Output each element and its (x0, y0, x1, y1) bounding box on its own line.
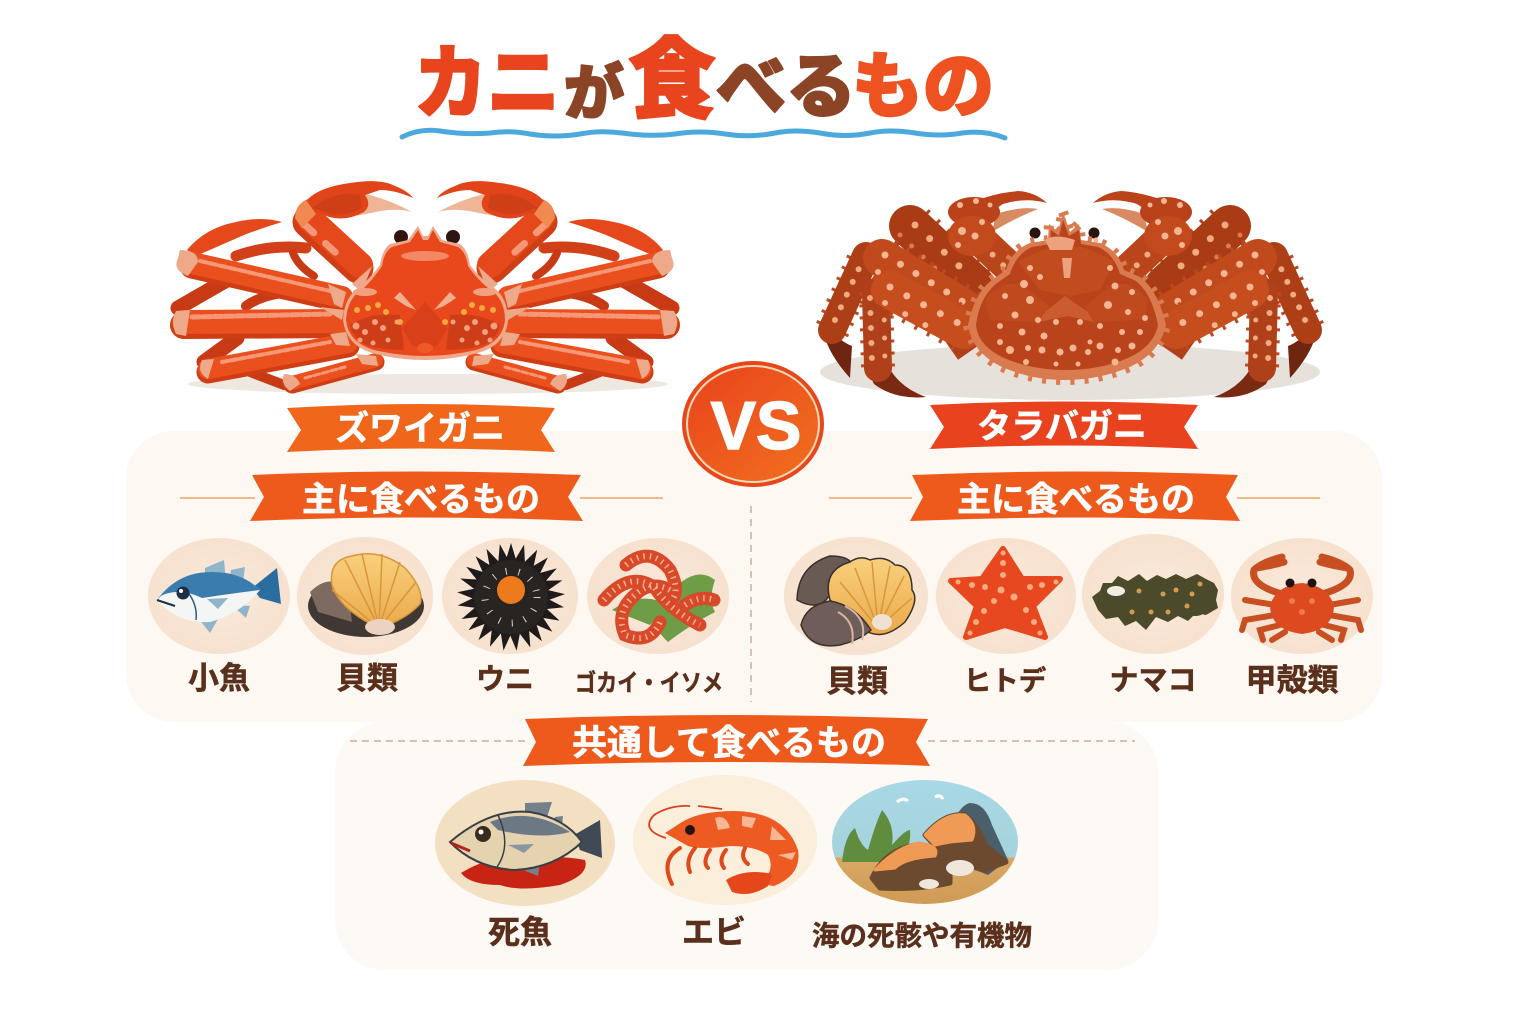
labels: common foods: 死魚 (488, 914, 552, 950)
labels: left foods: ウニ (476, 664, 534, 696)
icon: starfish (936, 538, 1076, 654)
labels: left foods: 貝類 (336, 661, 398, 696)
panel: common foods background (335, 722, 1158, 970)
heading: tarabagani ribbon (930, 402, 1198, 449)
labels: right foods: 甲殻類 (1246, 663, 1338, 698)
heading: tarabagani ribbon: タラバガニ (977, 408, 1147, 446)
icon: sea urchin (442, 538, 578, 654)
heading: common foods ribbon (523, 715, 930, 766)
labels: common foods (488, 914, 1032, 951)
labels: left foods (188, 661, 723, 697)
labels: left foods: ゴカイ・イソメ (575, 669, 723, 697)
icon: shellfish group (784, 537, 928, 655)
labels: right foods: 貝類 (826, 664, 888, 699)
icon: king crab (820, 191, 1320, 400)
heading: right main foods ribbon: 主に食べるもの (957, 481, 1195, 519)
title: が (564, 60, 624, 127)
labels: right foods: ヒトデ (964, 665, 1047, 696)
title: 食 (628, 31, 716, 130)
labels: right foods: ナマコ (1109, 665, 1197, 697)
icon: crustacean crab (1231, 538, 1373, 654)
labels: left foods: 小魚 (188, 661, 250, 696)
icon: dead fish (435, 780, 615, 906)
icon: shrimp (633, 775, 817, 905)
heading: zuwaigani ribbon: ズワイガニ (335, 409, 505, 448)
panel: species comparison background (126, 431, 1382, 722)
labels: common foods: エビ (682, 914, 746, 950)
heading: left main foods ribbon: 主に食べるもの (302, 481, 540, 519)
labels: common foods: 海の死骸や有機物 (812, 920, 1032, 951)
title (414, 31, 994, 130)
heading: common foods ribbon: 共通して食べるもの (572, 724, 886, 763)
title wave underline (402, 130, 1005, 138)
heading: zuwaigani ribbon (287, 404, 555, 452)
icon: clam (297, 537, 433, 655)
VS badge: VS (711, 388, 801, 464)
heading: right main foods ribbon (910, 472, 1240, 521)
labels: right foods (826, 663, 1338, 699)
icon: snow crab (173, 181, 677, 394)
heading: left main foods ribbon (250, 472, 583, 521)
icon: sea cucumber (1082, 534, 1224, 654)
title: カニ (414, 39, 560, 128)
VS badge (682, 361, 824, 487)
title: もの (852, 48, 994, 127)
title: べる (716, 48, 856, 126)
icon: small fish (148, 538, 290, 654)
icon: seabed remains (832, 780, 1018, 904)
icon: lugworms (587, 538, 729, 654)
